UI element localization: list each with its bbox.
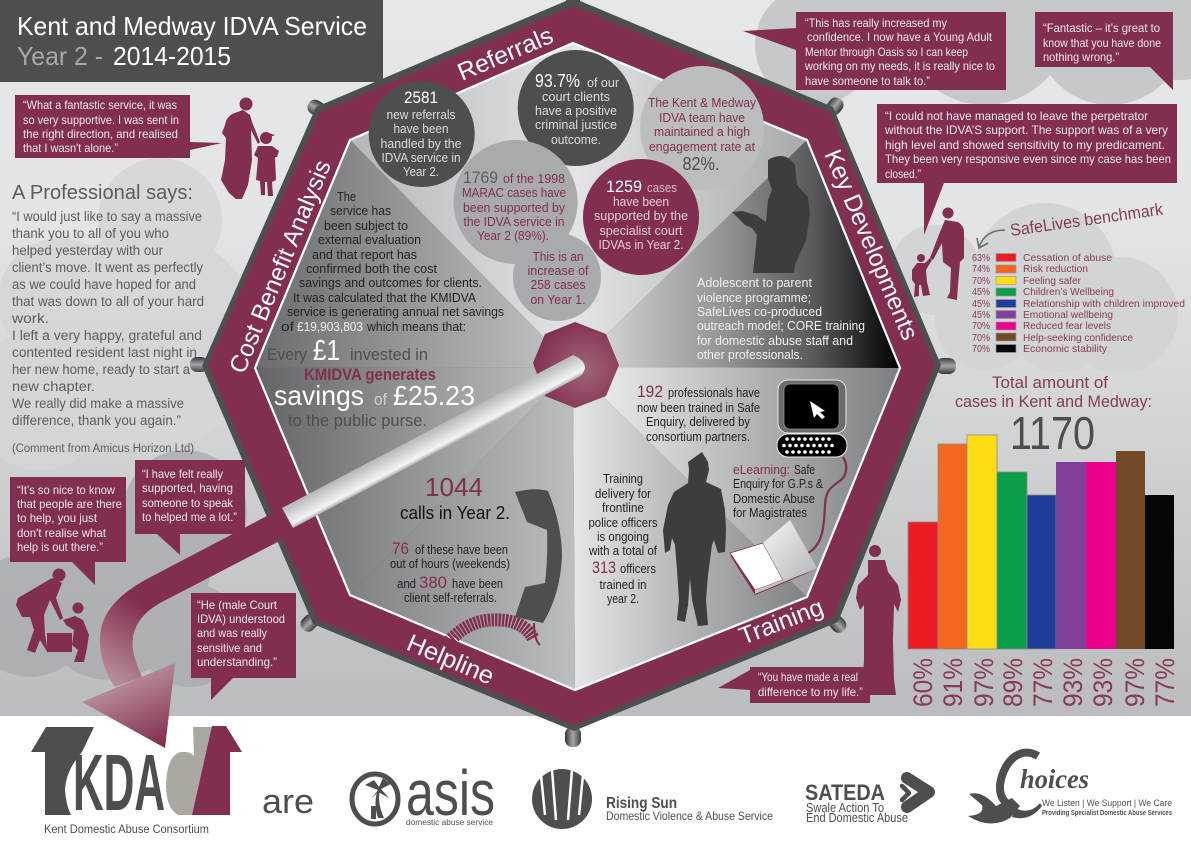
total cases heading: cases in Kent and Medway:	[955, 393, 1152, 411]
quote: male Court IDVA: “He (male Court	[197, 598, 278, 612]
quote: felt really supported: “I have felt really	[142, 467, 223, 481]
logo: KDAC	[31, 726, 242, 836]
text: Year 2 (89%): Year 2 (89%).	[477, 229, 549, 243]
SafeLives legend: 74%	[972, 264, 990, 275]
cost benefit text: and that report has	[312, 248, 417, 262]
SafeLives legend: 70%	[972, 344, 990, 355]
quote: increased my confidence: working on my needs, it is really nice to	[804, 59, 995, 73]
icon: adult carrying child on shoulders	[856, 545, 901, 695]
training: frontline officers: frontline	[602, 501, 644, 515]
headline: every £1 savings	[267, 335, 475, 430]
cost benefit text: confirmed both the cost	[306, 262, 438, 276]
quote: fantastic service	[15, 95, 222, 158]
training: eLearning: Domestic Abuse	[733, 492, 815, 506]
title panel: Year 2 -	[17, 41, 103, 71]
cost benefit text: service has	[330, 204, 391, 218]
quote: so nice to know: that people are there	[17, 497, 122, 511]
title panel: Kent and Medway IDVA Service	[17, 11, 367, 41]
training: frontline officers: police officers	[588, 516, 658, 530]
training: frontline officers: delivery for	[595, 487, 651, 501]
quote: fantastic service: “What a fantastic service, it was	[23, 98, 177, 112]
quote: felt really supported: someone to speak	[142, 496, 234, 510]
training: 192 professionals	[637, 382, 760, 444]
quote: so nice to know: help is out there.”	[17, 540, 103, 554]
circle: 82% engagement: IDVA team have	[659, 111, 745, 125]
cloud: SafeLives	[890, 203, 1178, 373]
training: eLearning: Safe	[794, 463, 815, 477]
helpline stats: and	[397, 577, 416, 591]
title panel	[0, 0, 383, 82]
training: frontline officers: with a total of	[588, 544, 657, 558]
key developments text: SafeLives co-produced	[697, 304, 822, 319]
quote: male Court IDVA: IDVA) understood	[197, 612, 285, 626]
logo: SATEDA: End Domestic Abuse	[806, 811, 908, 825]
helpline stats: of these have been	[415, 543, 508, 557]
circle: 1259 specialist court cases: 1259	[606, 177, 642, 196]
headline: every £1 savings: Every	[267, 345, 307, 364]
footer background	[0, 716, 1191, 842]
icon: computer	[777, 380, 847, 457]
total cases heading: Total amount of	[992, 374, 1108, 392]
quote: so nice to know: to help, you just	[17, 511, 98, 525]
SafeLives legend: Economic stability	[1023, 344, 1107, 355]
training: 192 professionals: 192	[637, 382, 663, 401]
professional testimonial: work.	[11, 311, 49, 326]
bar chart percentages	[908, 658, 1180, 707]
training: eLearning	[733, 463, 824, 520]
SafeLives legend: Help-seeking confidence	[1023, 333, 1133, 344]
bar chart percentages: 77%	[1028, 658, 1058, 707]
circle: 258 increase: on Year 1.	[530, 293, 586, 307]
SafeLives legend: 63%	[972, 253, 990, 264]
circle: 258 increase: increase of	[528, 264, 589, 278]
SafeLives legend: 45%	[972, 299, 990, 310]
professional testimonial: client’s move. It went as perfectly	[12, 260, 203, 275]
circle: 1769 MARAC cases: the IDVA service in	[464, 215, 565, 229]
logo: Rising Sun: Rising Sun	[606, 795, 677, 812]
helpline stats: client self-referrals.	[404, 591, 497, 605]
quote: male Court IDVA: understanding.”	[197, 655, 277, 669]
quote: felt really supported: supported, having	[142, 481, 233, 495]
icon: adult holding child's hand	[912, 208, 964, 300]
training: 192 professionals: consortium partners.	[646, 430, 750, 444]
SafeLives legend: Risk reduction	[1023, 264, 1088, 275]
key developments text: other professionals.	[697, 347, 803, 362]
headline: every £1 savings: £1	[313, 335, 340, 367]
quote: fantastic, nothing wrong: “Fantastic – it’s great to	[1043, 21, 1160, 35]
circle: 82% engagement: 82%.	[682, 154, 720, 174]
icon: mother and child with bag	[16, 568, 89, 662]
circle: 1769 MARAC cases: 1769	[463, 169, 498, 187]
total cases heading	[955, 374, 1152, 411]
total cases number: 1170	[1010, 407, 1095, 459]
training: frontline officers: 313	[592, 558, 616, 577]
SafeLives legend: Feeling safer	[1023, 276, 1082, 287]
quote: leaving the perpetrator: closed.”	[885, 167, 921, 181]
SafeLives legend: Cessation of abuse	[1023, 253, 1112, 264]
icon: open book	[730, 520, 817, 595]
arrow tail	[100, 508, 295, 687]
centre hub	[533, 322, 619, 408]
quote: leaving the perpetrator: without the IDVA’S support. The support was of a very	[884, 123, 1168, 137]
circle: 2581 referrals: 2581	[404, 89, 438, 107]
word: are: are	[262, 783, 314, 821]
cloud: top right	[755, 0, 1191, 105]
circle: 1769 MARAC cases: MARAC cases have	[462, 186, 566, 200]
SafeLives legend: 45%	[972, 310, 990, 321]
quote: fantastic service: the right direction, and realised	[23, 127, 178, 141]
logo: SATEDA: SATEDA	[805, 780, 885, 805]
key developments text: outreach model; CORE training	[697, 318, 865, 333]
icon: telephone handset and cord	[447, 489, 562, 645]
professional testimonial: We really did make a massive	[12, 396, 184, 411]
quote: so nice to know: don't realise what	[17, 526, 107, 540]
circle: 1259 specialist court cases: specialist court	[600, 224, 683, 238]
quote: leaving the perpetrator	[877, 104, 1177, 235]
professional testimonial: contented resident last night in	[12, 345, 197, 360]
band label: Referrals: Referrals	[454, 22, 557, 87]
cost benefit text: which means that:	[366, 320, 466, 334]
logo: Rising Sun: Domestic Violence & Abuse Service	[606, 809, 773, 823]
circle: 93.7% court clients: criminal justice	[535, 118, 617, 132]
quote: increased my confidence: have someone to talk to.”	[805, 74, 930, 88]
training: frontline officers: officers	[620, 562, 656, 576]
band label: Helpline: Helpline	[403, 630, 498, 690]
bar chart percentages: 91%	[938, 658, 968, 707]
logo: Choices	[968, 753, 1172, 824]
professional testimonial: new chapter.	[12, 379, 95, 394]
band label: Cost Benefit Analysis: Cost Benefit Analysis	[225, 156, 337, 377]
circle: 1259 specialist court cases	[583, 159, 699, 275]
logo: Oasis: asis	[406, 757, 495, 829]
quote: increased my confidence: “This has really increased my	[805, 16, 947, 30]
professional testimonial: (Comment from Amicus Horizon Ltd)	[12, 443, 194, 455]
band label: Key Developments: Key Developments	[818, 146, 923, 344]
circle: 2581 referrals	[369, 81, 475, 187]
icon: woman reading	[732, 156, 810, 273]
circle: 2581 referrals: new referrals	[386, 108, 456, 122]
cost benefit text: savings and outcomes for clients.	[299, 276, 482, 290]
headline: every £1 savings: £25.23	[393, 380, 475, 411]
quote: fantastic, nothing wrong	[1035, 12, 1173, 90]
helpline stats	[390, 472, 510, 605]
quote: real difference: “You have made a real	[758, 670, 858, 684]
logo: Oasis	[352, 757, 495, 829]
pointer stick	[282, 355, 585, 528]
SafeLives legend: Reduced fear levels	[1023, 321, 1111, 332]
cost benefit text: The	[337, 190, 356, 204]
logo: Oasis: domestic abuse service	[406, 818, 494, 827]
circle: 93.7% court clients: 93.7%	[535, 71, 580, 91]
quote: fantastic service: that I wasn't alone.”	[23, 141, 118, 155]
headline: every £1 savings: savings	[274, 380, 364, 411]
training: frontline officers: Training	[603, 472, 643, 486]
quote: fantastic, nothing wrong: know that you have done	[1043, 36, 1161, 50]
helpline stats: 76	[392, 539, 409, 558]
circle: 2581 referrals: Year 2.	[403, 165, 439, 179]
circle: 1259 specialist court cases: have been	[613, 195, 669, 209]
cost benefit text	[281, 190, 504, 334]
cost benefit text: of	[281, 320, 295, 334]
bar chart percentages: 97%	[969, 658, 999, 707]
cloud: left	[0, 158, 260, 470]
SafeLives benchmark heading: SafeLives benchmark	[1009, 200, 1165, 240]
bar chart percentages: 77%	[1150, 658, 1180, 707]
bar chart percentages: 93%	[1088, 658, 1118, 707]
SafeLives legend: Children’s Wellbeing	[1023, 287, 1114, 298]
quote: leaving the perpetrator: “I could not have managed to leave the perpetrator	[885, 109, 1148, 123]
quote: increased my confidence	[743, 12, 1006, 90]
training: frontline officers	[588, 472, 658, 606]
icon: police officer	[663, 452, 726, 626]
SafeLives legend: Relationship with children improved	[1023, 299, 1185, 310]
circle: 82% engagement	[640, 66, 764, 190]
training: frontline officers: year 2.	[607, 592, 639, 606]
circle: 82% engagement: maintained a high	[654, 125, 750, 139]
bar chart	[908, 435, 1174, 649]
training: 192 professionals: now been trained in Safe	[637, 401, 760, 415]
cost benefit text: external evaluation	[318, 233, 421, 247]
circle: 258 increase	[513, 233, 601, 321]
training: frontline officers: trained in	[600, 578, 647, 592]
circle: 82% engagement: engagement rate at	[649, 140, 756, 154]
quote: fantastic service: so very supportive. I was sent in	[23, 113, 179, 127]
circle: 93.7% court clients: outcome.	[551, 133, 601, 147]
helpline stats: out of hours (weekends)	[390, 557, 510, 571]
helpline stats: 380	[419, 573, 447, 592]
logo: Rising Sun	[532, 769, 773, 829]
circle: 1259 specialist court cases: cases	[647, 181, 677, 195]
training: eLearning: Enquiry for G.P.s &	[733, 477, 824, 491]
SafeLives legend: 70%	[972, 321, 990, 332]
circle: 258 increase: This is an	[532, 250, 584, 264]
quote: male Court IDVA	[191, 593, 296, 700]
logo: SATEDA: Swale Action To	[806, 801, 884, 815]
quote: increased my confidence: confidence. I now have a Young Adult	[807, 30, 993, 44]
headline: every £1 savings: invested in	[350, 345, 428, 364]
key developments text: Adolescent to parent	[697, 275, 812, 290]
circle: 93.7% court clients: have a positive	[535, 104, 617, 118]
cost benefit text: been subject to	[324, 219, 408, 233]
circle: 1769 MARAC cases	[454, 140, 578, 264]
bar chart percentages: 97%	[1120, 658, 1150, 707]
quote: increased my confidence: Mentor through Oasis so I can keep	[805, 45, 968, 59]
circle: 82% engagement: The Kent & Medway	[648, 96, 757, 110]
vertex pegs	[190, 0, 956, 747]
bar chart percentages: 89%	[998, 658, 1028, 707]
icon: mother and child	[221, 98, 279, 199]
circle: 2581 referrals: IDVA service in	[382, 151, 461, 165]
professional testimonial: thank you to all of you who	[12, 226, 169, 241]
training: frontline officers: is ongoing	[597, 530, 649, 544]
bar chart percentages: 60%	[908, 658, 938, 707]
circle: 1769 MARAC cases: been supported by	[463, 201, 566, 215]
circle: 1769 MARAC cases: of the 1998	[503, 172, 565, 186]
training: 192 professionals: Enquiry, delivered by	[646, 415, 751, 429]
professional testimonial: her new home, ready to start a	[12, 362, 190, 377]
circle: 93.7% court clients	[518, 50, 634, 166]
professional testimonial: “I would just like to say a massive	[12, 209, 202, 224]
helpline stats: 1044	[425, 472, 483, 502]
SafeLives legend: 70%	[972, 276, 990, 287]
quote: so nice to know: “It’s so nice to know	[17, 483, 115, 497]
quote: leaving the perpetrator: high level and showed sensitivity to my predicament.	[885, 138, 1165, 152]
professional testimonial: as we could have hoped for and	[12, 277, 196, 292]
quote: male Court IDVA: and was really	[197, 626, 267, 640]
professional testimonial: helped yesterday with our	[12, 243, 163, 258]
logo: Choices: We Listen | We Support | We Care	[1042, 798, 1172, 809]
octagon inner segments	[255, 43, 900, 690]
headline: every £1 savings: of	[374, 390, 387, 409]
cost benefit text: £19,903,803	[297, 320, 363, 334]
arrow head	[82, 663, 175, 748]
SafeLives legend: 45%	[972, 287, 990, 298]
circle: 258 increase: 258 cases	[530, 278, 586, 292]
logo: Choices: hoices	[1020, 764, 1089, 794]
circle: 2581 referrals: have been	[394, 122, 449, 136]
training: eLearning: for Magistrates	[733, 506, 807, 520]
professional testimonial	[11, 182, 204, 455]
icon: curved arrow to legend	[977, 230, 1005, 248]
SafeLives legend	[972, 253, 1185, 355]
circle: 2581 referrals: handled by the	[380, 137, 462, 151]
training: eLearning: eLearning:	[733, 463, 790, 477]
SafeLives legend: 70%	[972, 333, 990, 344]
helpline stats: calls in Year 2.	[400, 503, 510, 523]
SafeLives legend: Emotional wellbeing	[1023, 310, 1113, 321]
icon: cable from computer to book	[808, 457, 846, 553]
quote: felt really supported: to helped me a lot.”	[142, 510, 237, 524]
circle: 1259 specialist court cases: supported by the	[594, 209, 688, 223]
bar chart percentages: 93%	[1058, 658, 1088, 707]
logo: SATEDA	[805, 778, 929, 825]
cost benefit text: It was calculated that the KMIDVA	[293, 291, 477, 305]
octagon frame	[202, 0, 941, 731]
professional testimonial: difference, thank you again.”	[12, 413, 181, 428]
logo: KDAC: KDA	[73, 738, 165, 827]
quote: leaving the perpetrator: They been very responsive even since my case has been	[885, 152, 1171, 166]
quote: so nice to know	[10, 477, 126, 585]
title panel: 2014-2015	[113, 41, 231, 71]
headline: every £1 savings: to the public purse.	[288, 412, 427, 430]
quote: male Court IDVA: sensitive and	[197, 641, 262, 655]
professional testimonial: A Professional says:	[12, 182, 193, 204]
key developments text: violence programme;	[697, 290, 811, 305]
key developments text	[697, 275, 865, 362]
helpline stats: have been	[452, 577, 503, 591]
circle: 93.7% court clients: of our	[587, 76, 619, 90]
circle: 93.7% court clients: court clients	[542, 90, 610, 104]
band label: Training: Training	[735, 594, 827, 651]
professional testimonial: that was down to all of your hard	[12, 294, 204, 309]
quote: real difference: difference to my life.”	[758, 685, 863, 699]
logo: KDAC: Kent Domestic Abuse Consortium	[44, 824, 209, 836]
circle: 1259 specialist court cases: IDVAs in Year 2.	[598, 238, 684, 252]
cloud: lower left	[0, 450, 247, 687]
quote: real difference	[718, 667, 870, 703]
training: 192 professionals: professionals have	[668, 386, 760, 400]
quote: felt really supported	[135, 460, 245, 555]
quote: fantastic, nothing wrong: nothing wrong.”	[1043, 50, 1119, 64]
headline: every £1 savings: KMIDVA generates	[304, 366, 436, 384]
cost benefit text: service is generating annual net savings	[287, 305, 504, 319]
key developments text: for domestic abuse staff and	[697, 333, 853, 348]
professional testimonial: I left a very happy, grateful and	[12, 328, 202, 343]
